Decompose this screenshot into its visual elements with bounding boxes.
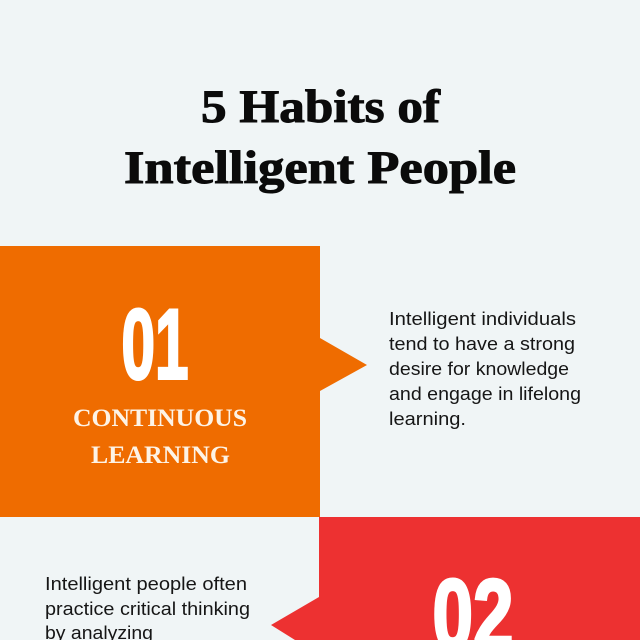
text block: habit 01 description: tend to have a strong [389,334,575,354]
panel: habit 02 critical thinking [271,517,640,640]
habit heading: CONTINUOUS [73,405,247,432]
text block: habit 02 description: practice critical thinking [45,599,250,619]
number 01: 01 [122,288,188,400]
text block: habit 01 description [389,309,581,429]
title [124,81,516,194]
text block: habit 02 description [45,574,250,640]
text block: habit 02 description: Intelligent people often [45,574,247,594]
title: Intelligent People [124,142,516,194]
text block: habit 01 description: Intelligent individuals [389,309,576,329]
habit heading [73,405,247,469]
habit heading: LEARNING [91,442,230,469]
red block with arrow [271,517,640,640]
text block: habit 01 description: and engage in lifelong [389,384,581,404]
text block: habit 01 description: desire for knowledge [389,359,569,379]
panel: habit 01 continuous learning [0,246,367,517]
orange block with arrow [0,246,367,517]
title: 5 Habits of [201,81,441,133]
text block: habit 01 description: learning. [389,409,466,429]
